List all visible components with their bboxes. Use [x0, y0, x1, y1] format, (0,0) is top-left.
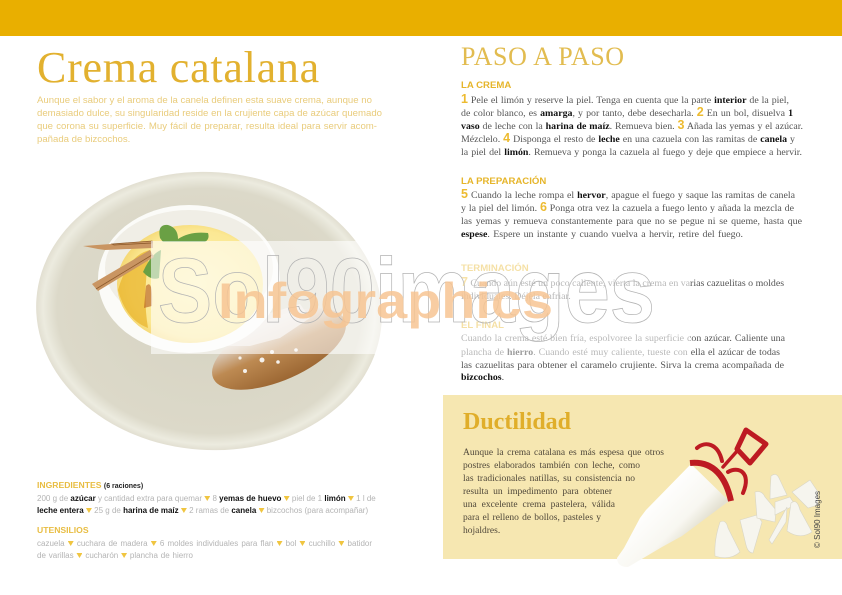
syringe body — [617, 464, 729, 567]
photo: crema catalana on a plate — [36, 172, 382, 450]
bowl — [98, 205, 280, 353]
cream — [117, 225, 263, 343]
photo credit: © Sol90 Images — [813, 491, 822, 548]
nozzles — [715, 474, 818, 558]
panel text: para el relleno de bollos, pasteles y — [463, 513, 601, 523]
panel heading: Ductilidad — [463, 409, 571, 435]
step block: la crema: de color blanco, es amarga, y por tanto, debe desecharla. 2 En un bol, disuelva 1 — [461, 105, 793, 119]
step block: el final: las cazuelitas para obtener el caramelo crujiente. Sirva la crema acompañada de — [461, 360, 784, 371]
step block: la crema: LA CREMA — [461, 80, 511, 91]
step block: el final: bizcochos. — [461, 372, 504, 383]
panel text — [463, 448, 664, 536]
step block: la preparacion: 5 Cuando la leche rompa el hervor, apague el fuego y saque las ramitas de canela — [461, 187, 795, 201]
intro text — [37, 95, 382, 145]
step block: terminacion: 7 Cuando aún esté un poco caliente, vierta la crema en varias cazuelitas o moldes — [461, 275, 784, 289]
syringe collar — [690, 463, 731, 501]
ingredients and utensils: de varillas cucharón plancha de hierro — [37, 551, 193, 560]
top banner — [0, 0, 842, 36]
syringe handle — [697, 430, 766, 493]
step block: terminacion: TERMINACIÓN — [461, 263, 529, 274]
step block: terminacion: individuales. Déjela enfriar. — [461, 291, 571, 302]
intro text: pañada de bizcochos. — [37, 134, 130, 145]
intro text: Aunque el sabor y el aroma de la canela definen esta suave crema, aunque no — [37, 95, 372, 106]
ingredients and utensils: UTENSILIOS — [37, 525, 89, 535]
ingredients and utensils — [37, 480, 376, 560]
step block: la crema: 1 Pele el limón y reserve la piel. Tenga en cuenta que la parte interior de la piel, — [461, 92, 789, 106]
panel text: postres elaborados también con leche, como — [463, 461, 640, 471]
step block: el final: EL FINAL — [461, 320, 504, 331]
step block: la preparacion: y la piel del limón. 6 Ponga otra vez la cazuela a fuego lento y añada la mezcla de — [461, 200, 794, 214]
step block: la preparacion: espese. Espere un instante y cuando vuelva a hervir, retire del fuego. — [461, 229, 743, 240]
step block: el final — [461, 320, 785, 383]
step block: el final: Cuando la crema esté bien fría, espolvoree la superficie con azúcar. Caliente una — [461, 333, 785, 344]
step block: la crema: Mézclelo. 4 Disponga el resto de leche en una cazuela con las ramitas de canela y — [461, 131, 795, 145]
biscuit — [201, 291, 357, 407]
cinnamon sticks — [83, 241, 154, 291]
panel text: hojaldres. — [463, 526, 500, 536]
section heading: paso a paso: PASO A PASO — [461, 42, 625, 71]
step block: la crema — [461, 80, 803, 158]
ingredients and utensils: INGREDIENTES (6 raciones) — [37, 480, 143, 490]
mint leaves — [143, 225, 209, 279]
illustration: piping syringe and nozzles — [617, 428, 818, 567]
panel text: resulta un impedimento para obtener — [463, 487, 612, 497]
ingredients and utensils: cazuela cuchara de madera 6 moldes individuales para flan bol cuchillo batidor — [37, 539, 372, 548]
step block: la preparacion: las yemas y remueva constantemente para que no se pegue ni se queme, hasta que — [461, 216, 802, 227]
watermark: Infographics — [218, 273, 553, 329]
panel text: una excelente crema pastelera, válida — [463, 500, 615, 510]
step block: la preparacion: LA PREPARACIÓN — [461, 176, 546, 187]
plate — [27, 160, 391, 462]
step block: la preparacion — [461, 176, 802, 240]
ingredients and utensils: leche entera 25 g de harina de maíz 2 ramas de canela bizcochos (para acompañar) — [37, 506, 368, 515]
panel text: Aunque la crema catalana es más espesa que otros — [463, 448, 664, 458]
title: Crema catalana — [37, 43, 320, 92]
step block: la crema: la piel del limón. Remueva y ponga la cazuela al fuego y deje que empiece a hervir. — [461, 147, 802, 158]
ingredients and utensils: 200 g de azúcar y cantidad extra para quemar 8 yemas de huevo piel de 1 limón 1 l de — [37, 494, 376, 503]
intro text: demasiado dulce, su singularidad reside en la crujiente capa de azúcar quemado — [37, 108, 382, 119]
panel text: las tradicionales natillas, su consistencia no — [463, 474, 635, 484]
intro text: que corona su superficie. Muy fácil de preparar, resulta ideal para servir acom- — [37, 121, 377, 132]
step block: la crema: vaso de leche con la harina de maíz. Remueva bien. 3 Añada las yemas y el azúcar. — [461, 118, 803, 132]
step block: el final: plancha de hierro. Cuando esté muy caliente, tueste con ella el azúcar de todas — [461, 347, 780, 358]
step block: terminacion — [461, 262, 784, 302]
panel: ductilidad — [443, 395, 842, 559]
